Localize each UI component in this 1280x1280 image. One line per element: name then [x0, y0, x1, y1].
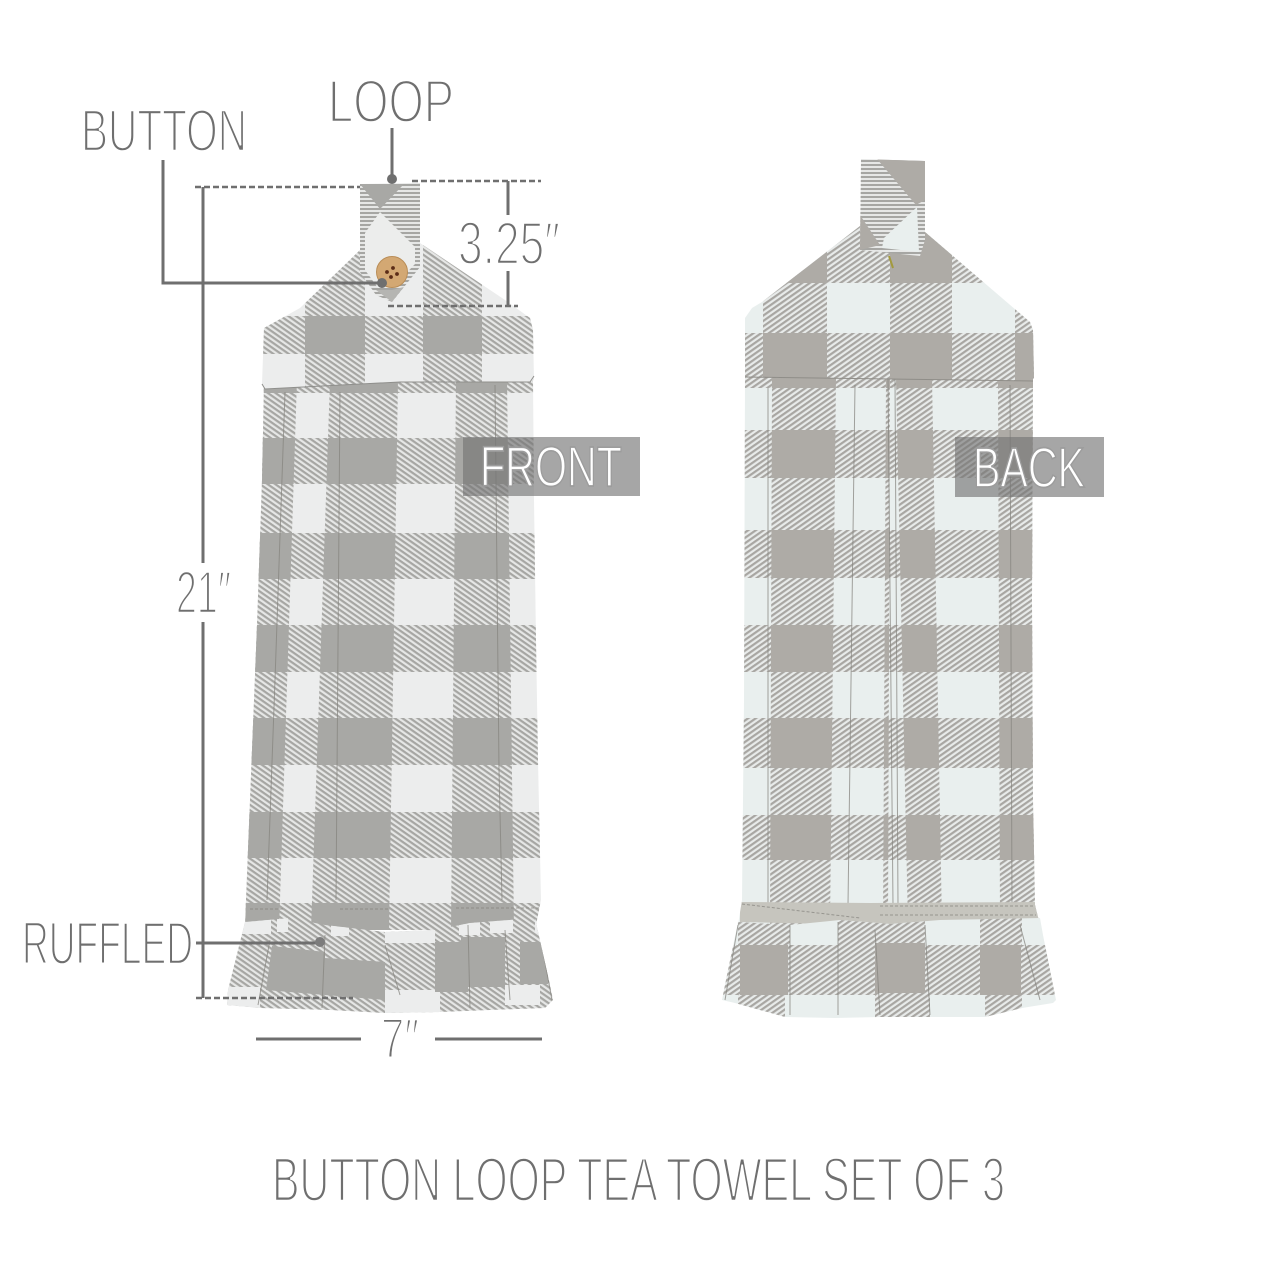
front tag: FRONT: [480, 435, 622, 499]
back towel body: [730, 370, 1050, 930]
back towel: [715, 155, 1065, 1020]
front towel top panel: [255, 240, 540, 392]
ruffled text: RUFFLED: [22, 910, 193, 977]
21 inch measure lines: [195, 187, 360, 998]
back tag: BACK: [973, 436, 1085, 500]
3.25 inch value: 3.25″: [458, 210, 560, 277]
label: button: [81, 98, 387, 288]
label: loop: [328, 68, 454, 184]
21 inch value: 21″: [176, 559, 231, 626]
back loop tab: [860, 159, 925, 268]
label: ruffled: [22, 910, 325, 977]
front towel: [220, 180, 560, 1016]
back towel top panel: [740, 220, 1040, 385]
ruffled leader line: [196, 937, 325, 947]
loop leader line: [387, 128, 397, 184]
front towel ruffle: [227, 918, 553, 1013]
front towel body: [230, 378, 550, 933]
button leader line: [163, 160, 387, 288]
7 inch value: 7″: [381, 1007, 419, 1071]
icon: wooden button: [376, 256, 408, 288]
3.25 inch measure lines: [388, 181, 541, 306]
button text: BUTTON: [81, 98, 247, 164]
front button loop: [360, 183, 420, 302]
loop text: LOOP: [328, 68, 454, 135]
back towel ruffle: [722, 918, 1056, 1018]
7 inch measure lines: [256, 1038, 542, 1040]
